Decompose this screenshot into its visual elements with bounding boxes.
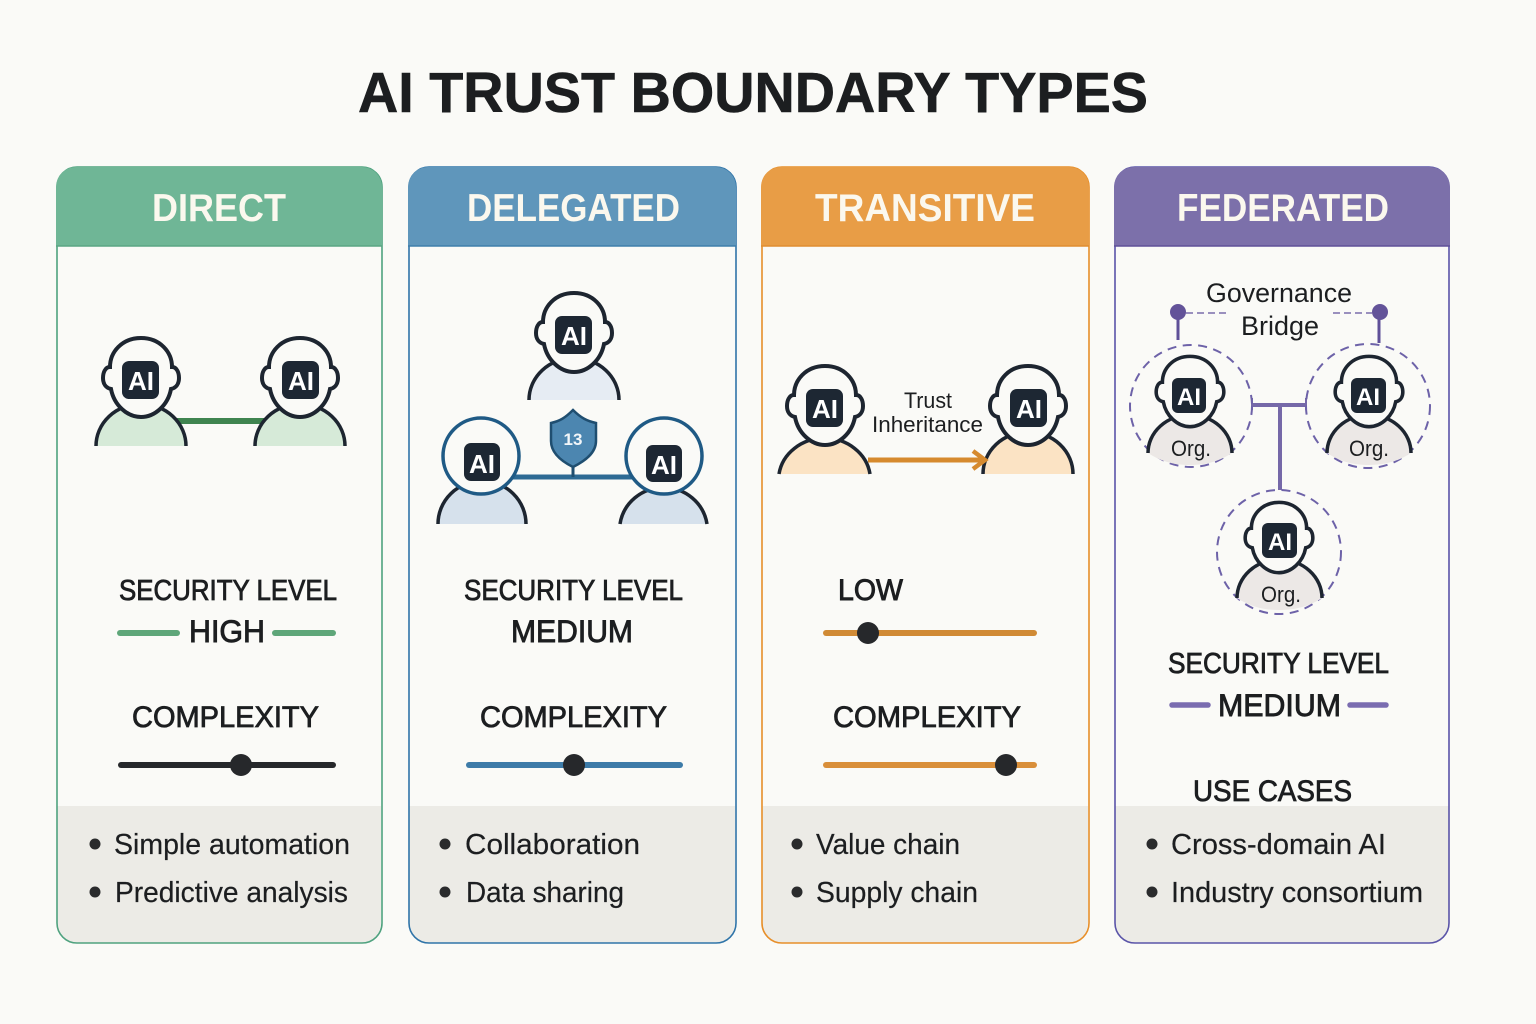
icon: delegate AI agent right: AI xyxy=(651,450,677,480)
direct connector line xyxy=(170,418,270,424)
direct header xyxy=(56,167,382,246)
icon: direct AI agent left xyxy=(96,338,186,446)
direct use cases list: Simple automation xyxy=(114,829,350,861)
icon: organization C dashed boundary with AI agent: AI xyxy=(1268,529,1292,556)
icon: direct AI agent left: AI xyxy=(128,366,154,396)
title: AI TRUST BOUNDARY TYPES xyxy=(358,61,1148,125)
delegated header xyxy=(408,167,736,246)
icon: organization A dashed boundary with AI agent: Org. xyxy=(1171,436,1211,461)
direct complexity slider: COMPLEXITY xyxy=(132,701,319,734)
trust inheritance label: Trust xyxy=(904,388,952,413)
delegated card footer background xyxy=(409,806,735,943)
governance bridge label xyxy=(1206,278,1352,341)
transitive card outline xyxy=(762,167,1089,943)
transitive use cases list: Value chain xyxy=(816,829,960,861)
direct card outline xyxy=(57,167,382,943)
icon: delegating AI agent top: AI xyxy=(561,321,587,351)
direct security level: HIGH xyxy=(189,613,265,649)
transitive card footer background xyxy=(762,806,1088,943)
federated use cases list xyxy=(1146,829,1423,909)
direct card footer background xyxy=(57,806,381,943)
governance bridge nodes and links xyxy=(1170,304,1388,343)
icon: direct AI agent right: AI xyxy=(288,366,314,396)
direct complexity slider xyxy=(121,701,333,776)
icon: organization A dashed boundary with AI agent xyxy=(1130,345,1252,467)
transitive header: TRANSITIVE xyxy=(815,187,1035,230)
icon: delegate AI agent left: AI xyxy=(469,449,495,479)
delegated use cases list: Collaboration xyxy=(465,829,640,861)
federation connector xyxy=(1252,398,1306,490)
federated card outline xyxy=(1115,167,1449,943)
federated use cases list: Cross-domain AI xyxy=(1171,829,1386,861)
icon: organization A dashed boundary with AI agent: AI xyxy=(1177,384,1201,411)
trust inheritance label: Inheritance xyxy=(872,412,983,437)
governance bridge label: Governance xyxy=(1206,278,1352,308)
federated header xyxy=(1114,167,1450,246)
use cases heading: USE CASES xyxy=(1193,775,1352,808)
delegated security level: MEDIUM xyxy=(511,613,633,649)
transitive use cases list: Supply chain xyxy=(816,877,978,909)
icon: shield 13: 13 xyxy=(564,430,582,449)
icon: transitive AI agent left xyxy=(779,366,870,474)
icon: organization B dashed boundary with AI agent: Org. xyxy=(1349,436,1389,461)
delegated card outline xyxy=(409,167,736,943)
icon: transitive AI agent right xyxy=(983,366,1073,474)
delegated link line xyxy=(512,474,632,480)
delegated security level: SECURITY LEVEL xyxy=(464,575,683,607)
delegated complexity slider: COMPLEXITY xyxy=(480,701,667,734)
trust inheritance arrow xyxy=(868,451,985,469)
delegated security level xyxy=(464,575,683,649)
icon: delegate AI agent left xyxy=(438,418,526,524)
transitive use cases list xyxy=(792,829,978,909)
transitive security slider: LOW xyxy=(838,574,904,607)
federated security level: MEDIUM xyxy=(1218,687,1341,723)
icon: direct AI agent right xyxy=(255,338,345,446)
governance bridge label: Bridge xyxy=(1241,311,1319,341)
icon: shield 13 xyxy=(551,410,596,477)
federated use cases list: Industry consortium xyxy=(1171,877,1423,909)
delegated use cases list xyxy=(440,829,640,909)
panel: delegated xyxy=(408,167,736,943)
delegated complexity slider xyxy=(469,701,680,776)
direct use cases list: Predictive analysis xyxy=(115,877,348,909)
transitive complexity slider xyxy=(826,701,1034,776)
federated security level xyxy=(1168,648,1389,723)
icon: organization C dashed boundary with AI agent xyxy=(1217,490,1341,614)
icon: organization B dashed boundary with AI agent: AI xyxy=(1356,384,1380,411)
direct security level: SECURITY LEVEL xyxy=(119,575,337,607)
icon: delegating AI agent top xyxy=(529,293,619,400)
icon: transitive AI agent left: AI xyxy=(812,394,838,424)
federated security level: SECURITY LEVEL xyxy=(1168,648,1389,680)
panel: federated xyxy=(1114,167,1450,943)
transitive security slider xyxy=(826,574,1034,644)
icon: transitive AI agent right: AI xyxy=(1016,394,1042,424)
icon: delegate AI agent right xyxy=(620,418,707,524)
panel: transitive xyxy=(761,167,1089,943)
direct use cases list xyxy=(90,829,350,909)
trust inheritance label xyxy=(872,388,983,437)
federated card footer background xyxy=(1115,806,1449,943)
direct header: DIRECT xyxy=(152,187,286,230)
panel: direct xyxy=(56,167,382,943)
federated header: FEDERATED xyxy=(1177,187,1389,230)
direct security level xyxy=(119,575,337,649)
transitive complexity slider: COMPLEXITY xyxy=(833,701,1021,734)
icon: organization B dashed boundary with AI agent xyxy=(1306,344,1430,468)
transitive header xyxy=(761,167,1089,246)
icon: organization C dashed boundary with AI agent: Org. xyxy=(1261,582,1301,607)
delegated use cases list: Data sharing xyxy=(466,877,624,909)
delegated header: DELEGATED xyxy=(467,187,680,230)
